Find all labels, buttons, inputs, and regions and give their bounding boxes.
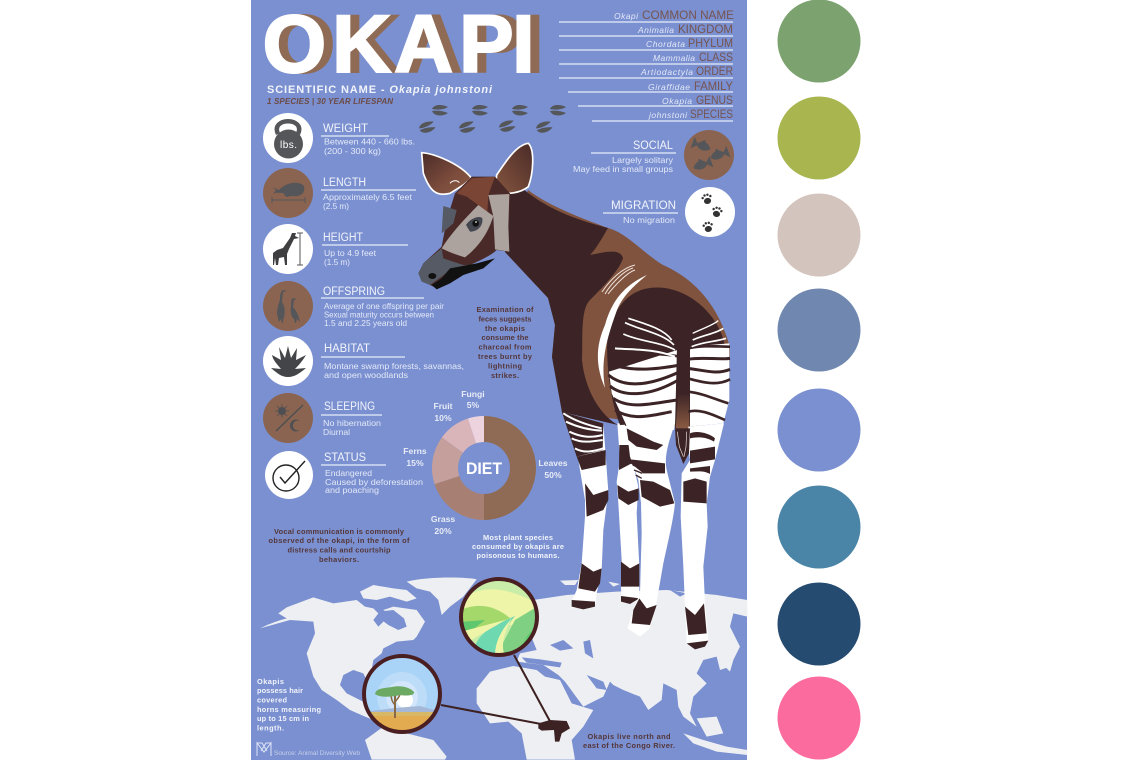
callout: range: [583, 732, 675, 750]
panel: length: [263, 168, 416, 218]
white shoulder streak: [598, 275, 647, 388]
diet donut chart: Fruit: [433, 401, 453, 411]
taxonomy table: SPECIES: [690, 107, 733, 121]
panel: status: STATUS: [324, 452, 366, 464]
panel: status: Caused by deforestation: [325, 477, 423, 487]
panel: weight: lbs.: [280, 140, 297, 151]
panel: social: SOCIAL: [633, 140, 674, 152]
black mouth: [432, 258, 495, 289]
panel: habitat: and open woodlands: [324, 370, 408, 380]
location line: forest inset to range: [514, 655, 552, 725]
dark neck and chest: [505, 188, 623, 425]
colour palette swatches: [778, 0, 860, 760]
callout: range: east of the Congo River.: [583, 741, 675, 750]
beige face: [442, 205, 493, 257]
callout: poisonous plants: Most plant species: [483, 533, 553, 542]
panel: habitat: Montane swamp forests, savannas,: [324, 361, 464, 371]
callout: charcoal: charcoal from: [478, 342, 532, 352]
shoulder hair lines: [602, 265, 635, 294]
taxonomy table: Mammalia: [653, 53, 695, 63]
head base: [418, 177, 510, 287]
front leg: [562, 412, 608, 609]
callout: poisonous plants: consumed by okapis are: [472, 542, 564, 551]
taxonomy table: Chordata: [646, 39, 685, 49]
callout: charcoal: lightning: [488, 362, 522, 370]
diet donut chart: Grass: [431, 514, 455, 524]
callout: vocal communication: behaviors.: [319, 555, 359, 564]
panel: length: Approximately 6.5 feet: [323, 192, 413, 202]
taxonomy table: Animalia: [637, 25, 674, 35]
diet donut chart: Ferns: [403, 446, 427, 456]
panel: habitat: HABITAT: [324, 343, 370, 355]
callout: poisonous plants: [472, 533, 564, 560]
taxonomy table: GENUS: [696, 93, 733, 107]
panel: social: [573, 130, 734, 180]
panel: migration: MIGRATION: [611, 200, 676, 212]
panel: social: Largely solitary: [612, 155, 674, 165]
inset: forest landscape circle: [460, 578, 545, 660]
panel: status: [265, 451, 423, 499]
taxonomy table: FAMILY: [694, 79, 733, 93]
callout: horns: length.: [257, 724, 284, 732]
icon: hoof prints: [418, 105, 566, 135]
diet donut chart: [403, 389, 568, 536]
panel: offspring: Average of one offspring per pair: [324, 301, 444, 311]
panel: sleeping: Diurnal: [323, 427, 350, 437]
icon: logo: [257, 743, 271, 756]
left ear: [422, 153, 472, 194]
title: OKAPI with shadow: OKAPI: [262, 0, 535, 90]
world map: [260, 578, 747, 760]
taxonomy table: [559, 8, 734, 121]
panel: height: (1.5 m): [324, 257, 350, 267]
callout: charcoal: Examination of: [476, 305, 534, 314]
callout: charcoal: trees burnt by: [478, 352, 533, 361]
diet donut chart: 20%: [434, 526, 452, 536]
taxonomy table: Giraffidae: [648, 82, 690, 92]
taxonomy table: ORDER: [696, 64, 733, 78]
head: [418, 143, 533, 289]
callout: horns: Okapis: [257, 677, 284, 686]
callout: charcoal: [476, 305, 534, 380]
diet donut chart: 5%: [467, 400, 480, 410]
panel: length: (2.5 m): [323, 201, 349, 211]
panel: weight: [263, 113, 415, 163]
grey muzzle: [418, 206, 473, 285]
callout: horns: covered: [257, 696, 287, 704]
location line: savanna inset to range: [441, 705, 541, 724]
taxonomy table: Okapia: [662, 96, 692, 106]
callout: vocal communication: distress calls and courtship: [288, 546, 391, 554]
panel: migration: No migration: [623, 215, 675, 225]
taxonomy table: Artiodactyla: [640, 67, 693, 77]
taxonomy table: PHYLUM: [688, 36, 733, 50]
callout: charcoal: feces suggests: [478, 314, 532, 324]
panel: weight: (200 - 300 kg): [324, 146, 381, 156]
hindquarter stripes: [608, 318, 730, 430]
callout: poisonous plants: poisonous to humans.: [476, 551, 560, 560]
callout: charcoal: the okapis: [485, 324, 525, 333]
scientific name: SCIENTIFIC NAME - Okapia johnstoni: [267, 84, 493, 96]
panel: status: Endangered: [325, 468, 372, 478]
callout: horns: possess hair: [257, 686, 303, 695]
diet donut chart: Fungi: [461, 389, 485, 399]
panel: offspring: OFFSPRING: [323, 286, 385, 298]
callout: vocal communication: observed of the okapi, in the form of: [268, 536, 410, 545]
title: OKAPI with shadow: OKAPI: [272, 0, 544, 90]
diet donut chart: Leaves: [538, 458, 568, 468]
taxonomy table: KINGDOM: [678, 22, 733, 36]
source: Source: Animal Diversity Web: [274, 750, 360, 757]
inset: savanna circle: [362, 654, 442, 738]
panel: offspring: 1.5 and 2.25 years old: [324, 318, 407, 328]
panel: offspring: [263, 281, 444, 331]
panel: height: [263, 224, 408, 274]
taxonomy table: Okapi: [614, 11, 639, 21]
eye: [466, 217, 482, 232]
panel: status: and poaching: [325, 485, 379, 495]
taxonomy table: CLASS: [699, 50, 733, 64]
panel: weight: Between 440 - 660 lbs.: [324, 136, 415, 146]
panel: height: Up to 4.9 feet: [324, 248, 377, 258]
panel: offspring: Sexual maturity occurs between: [324, 310, 434, 320]
tail tuft: [675, 428, 690, 464]
callout: vocal communication: Vocal communication is commonly: [274, 527, 405, 536]
right ear: [495, 143, 533, 193]
callout: horns: up to 15 cm in: [257, 714, 309, 723]
diet donut chart: DIET: [466, 459, 503, 478]
near legs: [626, 423, 724, 649]
panel: social: May feed in small groups: [573, 164, 673, 174]
panel: habitat: [263, 336, 464, 386]
forehead: [457, 177, 495, 212]
dark rump: [607, 287, 729, 425]
callout: horns: horns measuring: [257, 705, 321, 714]
callout: range: Okapis live north and: [588, 732, 671, 741]
okapi illustration: [418, 143, 730, 649]
callout: charcoal: strikes.: [491, 371, 519, 380]
diet donut chart: 15%: [406, 458, 424, 468]
taxonomy table: johnstoni: [648, 110, 688, 120]
panel: weight: WEIGHT: [323, 123, 368, 135]
panel: migration: [603, 187, 735, 237]
body and neck: [505, 190, 730, 430]
taxonomy table: COMMON NAME: [642, 8, 734, 22]
diet donut chart: 50%: [544, 470, 562, 480]
panel: length: LENGTH: [323, 177, 366, 189]
panel: height: HEIGHT: [323, 232, 363, 244]
panel: sleeping: SLEEPING: [324, 401, 375, 413]
okapi range on Africa: [538, 720, 570, 742]
panel: infographic background: [251, 0, 747, 760]
diet donut chart: 10%: [434, 413, 452, 423]
callout: charcoal: consume the: [482, 333, 528, 342]
panel: sleeping: No hibernation: [323, 418, 381, 428]
callout: horns: [257, 677, 321, 732]
species and lifespan: 1 SPECIES | 30 YEAR LIFESPAN: [267, 97, 393, 106]
callout: vocal communication: [268, 527, 410, 564]
panel: sleeping: [263, 393, 382, 443]
far hind and fore legs: [617, 423, 639, 604]
